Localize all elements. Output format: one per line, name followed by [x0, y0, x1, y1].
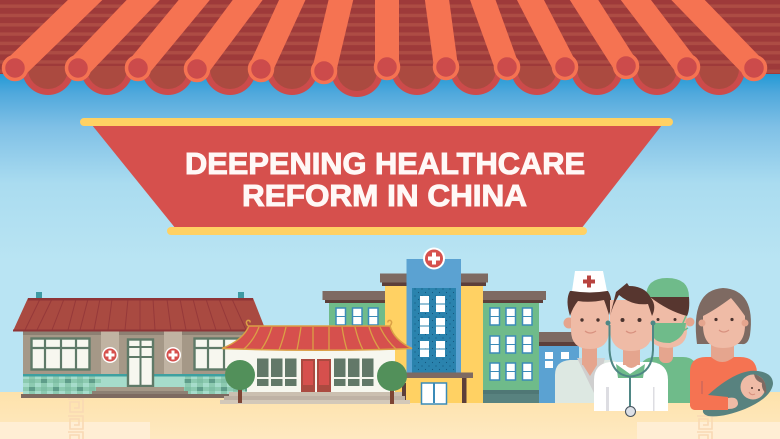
- tree left: [225, 360, 255, 403]
- roof tile band: [0, 0, 780, 74]
- pavilion windows: [257, 358, 374, 386]
- title banner: [80, 118, 673, 235]
- clinic steps: [21, 387, 236, 398]
- person: mother with baby: [690, 288, 773, 416]
- baby in wrap: [703, 371, 773, 416]
- clinic left window: [31, 338, 90, 370]
- hospital yellow block: [380, 274, 488, 403]
- pavilion steps: [220, 392, 410, 404]
- ground pattern: meander tiles: [68, 399, 712, 439]
- pavilion wall: [247, 350, 395, 393]
- hospital right blue wing: [539, 332, 579, 403]
- nurse hair: [568, 291, 611, 316]
- ground: [0, 392, 780, 439]
- temple roof: [0, 0, 780, 97]
- hospital central tower: [406, 259, 461, 373]
- doctor hair: [610, 283, 654, 316]
- person: nurse: [555, 271, 620, 403]
- hospital right green wing: [483, 291, 546, 403]
- icon: clinic cross right: [165, 347, 181, 363]
- icon: clinic cross left: [102, 347, 118, 363]
- stethoscope: [606, 320, 656, 416]
- pavilion roof: [222, 320, 412, 350]
- clinic right window: [194, 338, 254, 370]
- hospital left green wing: [322, 291, 388, 352]
- roof beam caps: [4, 54, 766, 82]
- pavilion doors: [301, 359, 331, 392]
- title: DEEPENING HEALTHCARE: [185, 147, 585, 181]
- clinic building (left): [13, 292, 266, 398]
- clinic roof: [13, 298, 266, 331]
- tree right: [377, 361, 407, 404]
- icon: hospital cross: [423, 248, 445, 270]
- hospital entrance: [402, 372, 473, 404]
- person: surgeon: [640, 278, 697, 403]
- clinic door: [128, 339, 153, 386]
- title: REFORM IN CHINA: [242, 179, 527, 213]
- sky background: [0, 70, 780, 260]
- person: doctor: [594, 283, 668, 416]
- people: [555, 271, 773, 416]
- roof beams: [15, 0, 754, 71]
- roof scallops: [0, 0, 780, 97]
- hospital complex: [322, 248, 579, 404]
- temple pavilion (centre): [220, 320, 412, 404]
- mother's arm and hand: [690, 392, 738, 410]
- clinic tiles: [23, 375, 248, 395]
- clinic wall: [23, 331, 258, 375]
- nurse cap: [572, 271, 607, 292]
